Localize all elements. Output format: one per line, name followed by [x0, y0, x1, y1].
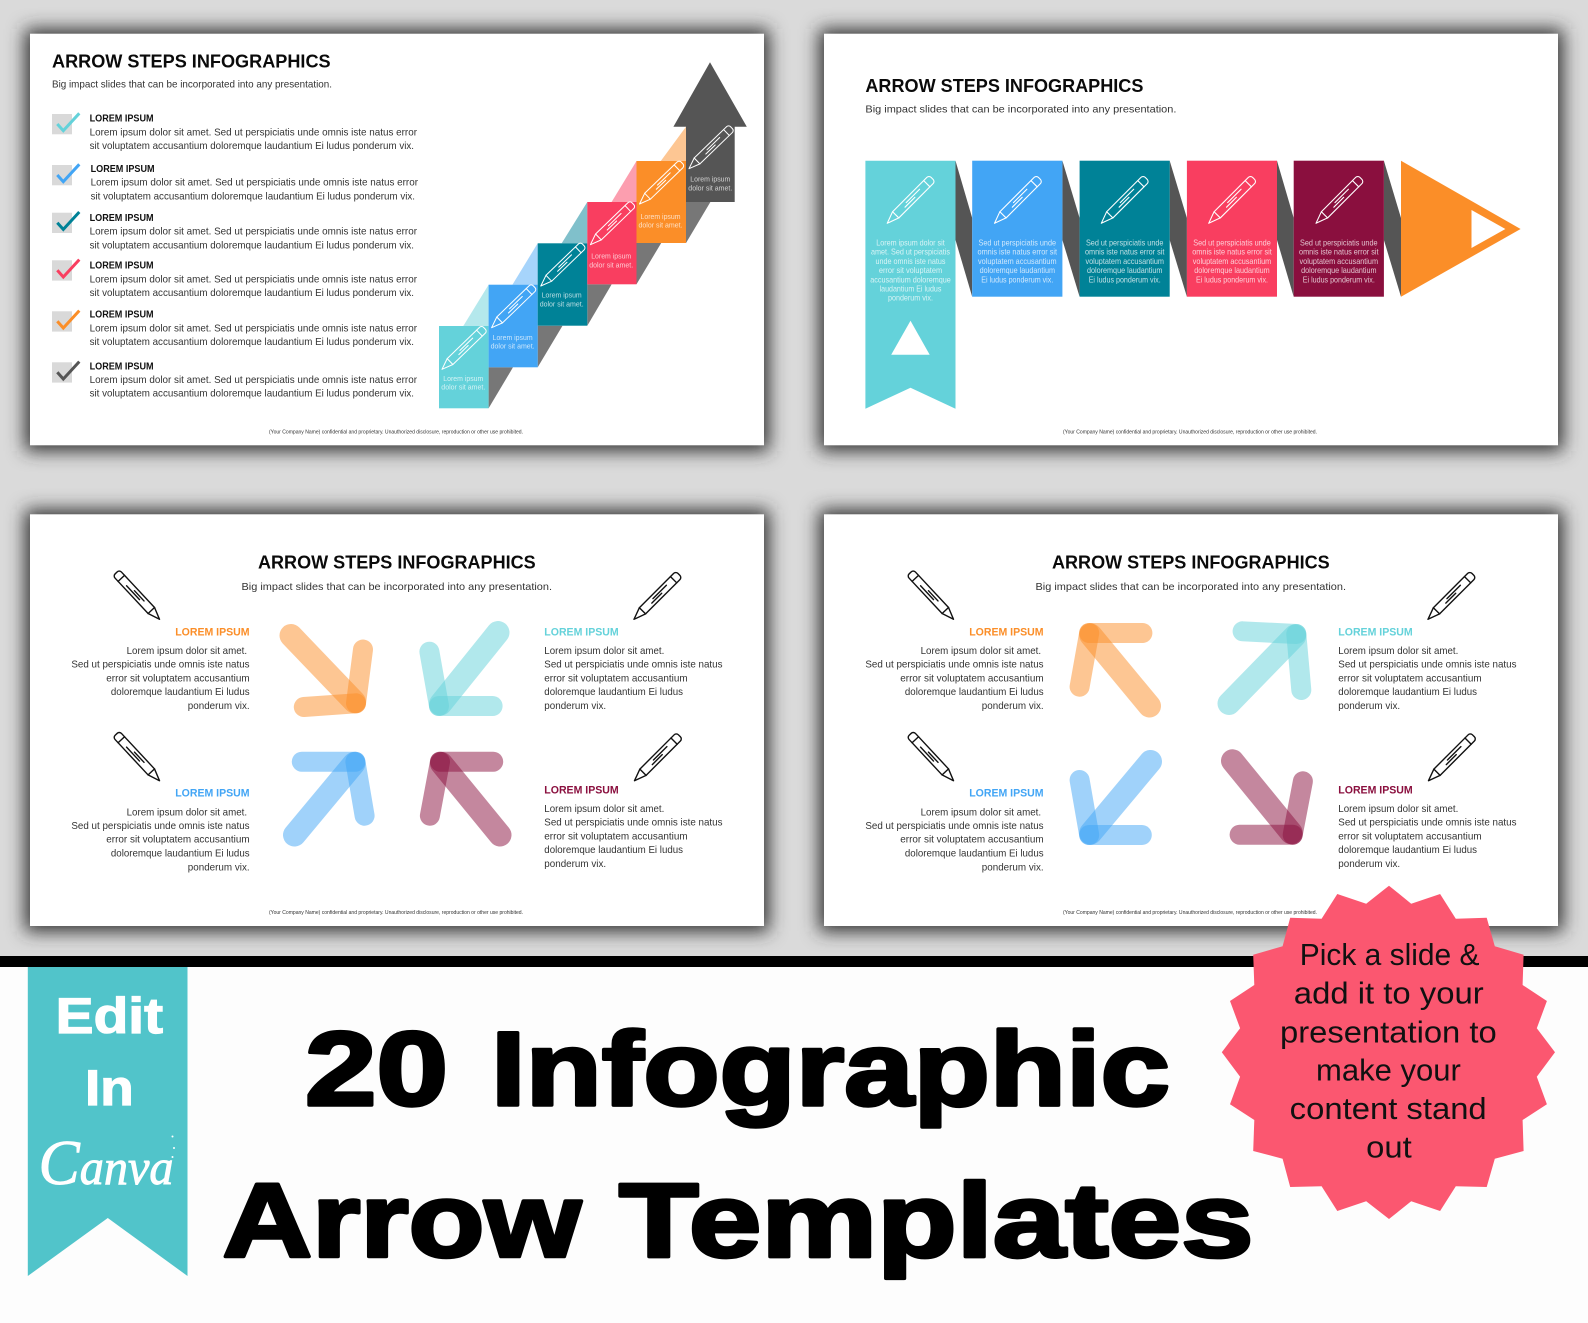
ribbon column 4: Sed ut perspiciatis unde: [1193, 239, 1271, 248]
step 3: [538, 242, 587, 326]
ribbon column 1: error sit voluptatem: [879, 266, 942, 275]
text block: blue: doloremque laudantium Ei ludus: [111, 847, 250, 859]
arrow: blue inward: [294, 762, 365, 835]
arrow: maroon outward: [1232, 761, 1303, 835]
text block: orange: error sit voluptatem accusantium: [900, 672, 1044, 684]
step 4: dolor sit amet.: [589, 260, 633, 269]
step 1: Lorem ipsum: [443, 374, 483, 383]
ribbon column 4: doloremque laudantium: [1194, 266, 1270, 275]
icon: pencil top left: [113, 570, 163, 622]
text block: maroon: ponderum vix.: [544, 858, 606, 870]
text block: blue: LOREM IPSUM: [175, 788, 250, 800]
text block: orange: ponderum vix.: [188, 700, 250, 712]
arrow head and top step: [673, 62, 747, 202]
arrow: blue outward: [1080, 762, 1150, 835]
text block: teal: doloremque laudantium Ei ludus: [1338, 686, 1477, 698]
ribbon column 2: omnis iste natus error sit: [978, 248, 1058, 257]
text block: orange: error sit voluptatem accusantium: [106, 672, 250, 684]
checklist item 5: Lorem ipsum dolor sit amet. Sed ut perspiciatis unde omnis iste natus error: [90, 322, 417, 334]
ribbon column 5: Ei ludus ponderum vix.: [1303, 275, 1375, 284]
text block: orange: LOREM IPSUM: [969, 626, 1044, 638]
text block: blue: LOREM IPSUM: [969, 788, 1044, 800]
checklist item 1: sit voluptatem accusantium doloremque laudantium Ei ludus ponderum vix.: [90, 140, 414, 152]
text block: blue: Lorem ipsum dolor sit amet.: [127, 806, 247, 818]
arrow: orange inward: [291, 636, 363, 707]
text block: orange: Sed ut perspiciatis unde omnis iste natus: [865, 659, 1044, 671]
step 5: dolor sit amet.: [638, 221, 682, 230]
ribbon column 1: unde omnis iste natus: [876, 257, 946, 266]
ribbon column 4: voluptatem accusantium: [1193, 257, 1271, 266]
step 2: dolor sit amet.: [491, 342, 535, 351]
checklist item 3: LOREM IPSUM: [90, 213, 154, 224]
checklist item 4: [52, 260, 417, 299]
step 5: [636, 160, 686, 243]
slide 4 footer: (Your Company Name) confidential and proprietary. Unauthorized disclosure, reproduction or other use prohibited.: [1063, 910, 1317, 916]
ribbon column 3: Sed ut perspiciatis unde: [1086, 239, 1164, 248]
text block: maroon: error sit voluptatem accusantium: [1338, 830, 1482, 842]
icon: pencil top right: [631, 571, 682, 622]
ribbon column 5: doloremque laudantium: [1301, 266, 1377, 275]
text block: maroon: Lorem ipsum dolor sit amet.: [544, 803, 664, 815]
dark step shadows: [489, 202, 710, 408]
checklist item 6: sit voluptatem accusantium doloremque laudantium Ei ludus ponderum vix.: [90, 388, 414, 400]
ribbon column 4: omnis iste natus error sit: [1192, 248, 1272, 257]
ribbon column 5: omnis iste natus error sit: [1299, 248, 1379, 257]
starburst callout: [1222, 886, 1555, 1219]
starburst callout: add it to your: [1294, 975, 1484, 1010]
slide 2 footer: (Your Company Name) confidential and proprietary. Unauthorized disclosure, reproduction or other use prohibited.: [1063, 429, 1317, 435]
checklist item 1: [52, 113, 417, 152]
icon: pencil top right: [1425, 571, 1476, 622]
icon: pencil bottom right: [631, 733, 683, 784]
text block: maroon: error sit voluptatem accusantium: [544, 830, 688, 842]
text block: blue: doloremque laudantium Ei ludus: [905, 847, 1044, 859]
step 4: [587, 201, 636, 284]
ribbon column 1: amet. Sed ut perspiciatis: [871, 248, 950, 257]
ribbon column 2: voluptatem accusantium: [978, 257, 1057, 266]
starburst callout: out: [1366, 1129, 1412, 1164]
step 3: dolor sit amet.: [540, 299, 584, 308]
checklist: [52, 113, 418, 400]
text block: orange: doloremque laudantium Ei ludus: [111, 686, 250, 698]
slide 3 footer: (Your Company Name) confidential and proprietary. Unauthorized disclosure, reproduction or other use prohibited.: [269, 910, 523, 916]
icon: pencil top left: [907, 570, 957, 622]
checklist item 2: sit voluptatem accusantium doloremque laudantium Ei ludus ponderum vix.: [91, 191, 415, 203]
text block: blue: Sed ut perspiciatis unde omnis iste natus: [865, 820, 1044, 832]
grey fold connectors: [956, 161, 1401, 297]
bottom banner background: [0, 967, 1588, 1323]
checklist item 6: [52, 361, 417, 400]
text block: blue: error sit voluptatem accusantium: [106, 834, 250, 846]
checklist item 2: Lorem ipsum dolor sit amet. Sed ut perspiciatis unde omnis iste natus error: [91, 177, 418, 189]
text block: blue: [71, 788, 250, 873]
text block: orange: Lorem ipsum dolor sit amet.: [921, 645, 1041, 657]
slide 1: arrow steps staircase with checklist: [25, 29, 769, 451]
ribbon column 3: Ei ludus ponderum vix.: [1089, 275, 1161, 284]
checklist item 4: LOREM IPSUM: [90, 261, 154, 272]
checklist item 1: Lorem ipsum dolor sit amet. Sed ut perspiciatis unde omnis iste natus error: [90, 126, 417, 138]
checklist item 6: LOREM IPSUM: [90, 361, 154, 372]
starburst callout: presentation to: [1280, 1014, 1497, 1049]
text block: teal: LOREM IPSUM: [1338, 626, 1413, 638]
slide 1 footer: (Your Company Name) confidential and proprietary. Unauthorized disclosure, reproduction or other use prohibited.: [269, 429, 523, 435]
text block: maroon: ponderum vix.: [1338, 858, 1400, 870]
text block: teal: [1338, 626, 1516, 712]
main headline: Templates: [619, 1163, 1254, 1280]
arrow: maroon inward: [430, 762, 500, 835]
text block: teal: ponderum vix.: [544, 700, 606, 712]
slide 4 subtitle: Big impact slides that can be incorporated into any presentation.: [1036, 581, 1346, 593]
slide 4: arrows pointing outward: [819, 510, 1563, 932]
text block: teal: Sed ut perspiciatis unde omnis iste natus: [1338, 659, 1516, 671]
step 1: dolor sit amet.: [441, 383, 485, 392]
step 5: Lorem ipsum: [640, 212, 680, 221]
ribbon column 1: Lorem ipsum dolor sit: [876, 239, 945, 248]
slide 3 title: ARROW STEPS INFOGRAPHICS: [258, 552, 536, 573]
text block: maroon: [544, 784, 722, 870]
light step connectors: [463, 127, 686, 326]
ribbon column 1: ponderum vix.: [888, 294, 933, 303]
ribbon column 2: Ei ludus ponderum vix.: [981, 275, 1053, 284]
checklist item 1: LOREM IPSUM: [90, 114, 154, 125]
ribbon column 1: [865, 161, 956, 409]
arrow: teal inward: [429, 632, 498, 706]
ribbon column 2: Sed ut perspiciatis unde: [979, 239, 1056, 248]
arrow head and top step: dolor sit amet.: [688, 183, 732, 192]
starburst callout: make your: [1316, 1053, 1461, 1088]
ribbon column 5: voluptatem accusantium: [1300, 257, 1378, 266]
icon: pencil bottom left: [907, 731, 957, 784]
checklist item 3: Lorem ipsum dolor sit amet. Sed ut perspiciatis unde omnis iste natus error: [90, 226, 417, 238]
text block: teal: LOREM IPSUM: [544, 626, 619, 638]
text block: blue: ponderum vix.: [982, 861, 1044, 873]
ribbon column 1: accusantium doloremque: [870, 275, 951, 284]
ribbon column 1: laudantium Ei ludus: [880, 284, 941, 293]
starburst callout: content stand: [1290, 1091, 1487, 1126]
text block: teal: Lorem ipsum dolor sit amet.: [1338, 645, 1458, 657]
icon: pencil bottom right: [1425, 733, 1477, 784]
ribbon column 5: [1294, 161, 1384, 297]
text block: orange: [71, 626, 250, 712]
checklist item 5: LOREM IPSUM: [90, 310, 154, 321]
ribbon: edit in canva: [28, 967, 187, 1276]
arrow: teal outward: [1229, 631, 1301, 704]
ribbon column 4: [1187, 161, 1277, 297]
ribbon column 5: Sed ut perspiciatis unde: [1300, 239, 1378, 248]
text block: maroon: Lorem ipsum dolor sit amet.: [1338, 803, 1458, 815]
text block: orange: ponderum vix.: [982, 700, 1044, 712]
text block: teal: Sed ut perspiciatis unde omnis iste natus: [544, 659, 722, 671]
text block: maroon: doloremque laudantium Ei ludus: [1338, 844, 1477, 856]
ribbon: edit in canva: In: [85, 1060, 134, 1116]
main headline: Infographic: [491, 1011, 1170, 1128]
checklist item 4: sit voluptatem accusantium doloremque laudantium Ei ludus ponderum vix.: [90, 287, 414, 299]
text block: teal: [544, 626, 722, 712]
text block: maroon: LOREM IPSUM: [544, 784, 619, 796]
arrow: orange outward: [1080, 633, 1150, 706]
text block: maroon: Sed ut perspiciatis unde omnis iste natus: [544, 817, 722, 829]
text block: orange: Lorem ipsum dolor sit amet.: [127, 645, 247, 657]
step 3: Lorem ipsum: [542, 291, 582, 300]
text block: orange: LOREM IPSUM: [175, 626, 250, 638]
text block: blue: [865, 788, 1044, 873]
ribbon column 3: omnis iste natus error sit: [1085, 248, 1165, 257]
black divider bar: [0, 956, 1588, 967]
starburst callout: Pick a slide &: [1300, 937, 1480, 972]
page background: [0, 0, 1588, 957]
checklist item 6: Lorem ipsum dolor sit amet. Sed ut perspiciatis unde omnis iste natus error: [90, 374, 417, 386]
step 4: Lorem ipsum: [591, 252, 631, 261]
icon: up triangle: [891, 321, 930, 355]
ribbon: edit in canva: Canva: [38, 1127, 174, 1198]
text block: teal: Lorem ipsum dolor sit amet.: [544, 645, 664, 657]
step 1: [439, 325, 489, 408]
slide 3: arrows pointing inward: [25, 510, 769, 932]
slide 2 title: ARROW STEPS INFOGRAPHICS: [865, 75, 1143, 96]
text block: maroon: Sed ut perspiciatis unde omnis iste natus: [1338, 817, 1516, 829]
text block: maroon: doloremque laudantium Ei ludus: [544, 844, 683, 856]
text block: blue: Sed ut perspiciatis unde omnis iste natus: [71, 820, 250, 832]
text block: teal: error sit voluptatem accusantium: [544, 672, 688, 684]
slide 1 title: ARROW STEPS INFOGRAPHICS: [52, 51, 331, 72]
slide 3 subtitle: Big impact slides that can be incorporated into any presentation.: [242, 581, 552, 593]
slide 2 subtitle: Big impact slides that can be incorporated into any presentation.: [865, 104, 1176, 116]
text block: maroon: LOREM IPSUM: [1338, 784, 1413, 796]
ribbon: edit in canva: Edit: [56, 988, 163, 1044]
text block: orange: [865, 626, 1044, 712]
step 2: [489, 284, 538, 367]
slide 1 subtitle: Big impact slides that can be incorporated into any presentation.: [52, 79, 332, 91]
checklist item 3: sit voluptatem accusantium doloremque laudantium Ei ludus ponderum vix.: [90, 239, 414, 251]
icon: pencil bottom left: [113, 731, 163, 784]
staircase arrow diagram: [439, 62, 747, 408]
slide 2: horizontal ribbon arrow: [819, 29, 1563, 451]
main headline: 20: [305, 1011, 448, 1128]
checklist item 2: LOREM IPSUM: [91, 164, 155, 175]
text block: orange: doloremque laudantium Ei ludus: [905, 686, 1044, 698]
checklist item 3: [52, 212, 417, 251]
text block: blue: error sit voluptatem accusantium: [900, 834, 1044, 846]
text block: orange: Sed ut perspiciatis unde omnis iste natus: [71, 659, 250, 671]
ribbon column 2: [972, 161, 1062, 297]
ribbon column 3: doloremque laudantium: [1087, 266, 1163, 275]
step 2: Lorem ipsum: [493, 333, 533, 342]
text block: maroon: [1338, 784, 1516, 870]
main headline: Arrow: [222, 1163, 581, 1280]
text block: teal: ponderum vix.: [1338, 700, 1400, 712]
main headline: [222, 1011, 1254, 1280]
ribbon column 2: doloremque laudantium: [980, 266, 1055, 275]
ribbon column 4: Ei ludus ponderum vix.: [1196, 275, 1268, 284]
text block: teal: doloremque laudantium Ei ludus: [544, 686, 683, 698]
text block: blue: ponderum vix.: [188, 861, 250, 873]
text block: teal: error sit voluptatem accusantium: [1338, 672, 1482, 684]
ribbon column 3: voluptatem accusantium: [1085, 257, 1164, 266]
slide 4 title: ARROW STEPS INFOGRAPHICS: [1052, 552, 1330, 573]
orange arrow head: [1401, 161, 1521, 297]
arrow head and top step: Lorem ipsum: [690, 174, 730, 183]
checklist item 5: [52, 310, 417, 348]
checklist item 4: Lorem ipsum dolor sit amet. Sed ut perspiciatis unde omnis iste natus error: [90, 273, 417, 285]
text block: blue: Lorem ipsum dolor sit amet.: [921, 806, 1041, 818]
ribbon column 3: [1080, 161, 1170, 297]
checklist item 2: [52, 164, 418, 203]
checklist item 5: sit voluptatem accusantium doloremque laudantium Ei ludus ponderum vix.: [90, 336, 414, 348]
